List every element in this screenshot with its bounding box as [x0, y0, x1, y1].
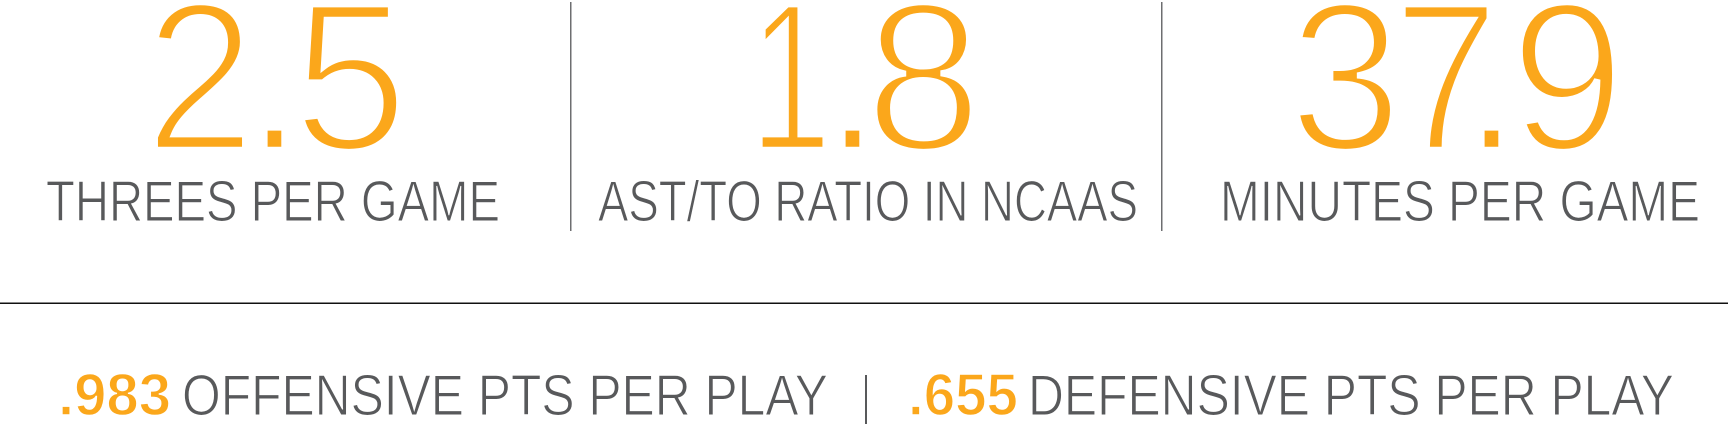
label ast/to ratio: AST/TO RATIO IN NCAAS	[598, 170, 1138, 234]
big number 2.5	[145, 0, 408, 195]
bottom separator	[865, 375, 867, 424]
defensive points per play	[908, 362, 1674, 428]
offensive points per play	[58, 362, 828, 428]
stat: assist to turnover ratio	[598, 0, 1138, 234]
horizontal rule	[0, 302, 1728, 304]
label offensive: OFFENSIVE PTS PER PLAY	[182, 364, 828, 428]
divider left	[570, 2, 572, 231]
stat: threes per game	[46, 0, 500, 234]
big number 37.9	[1289, 0, 1625, 195]
big number 1.8	[749, 0, 982, 195]
divider right	[1161, 2, 1162, 231]
label threes per game: THREES PER GAME	[46, 170, 500, 234]
value .983: .983	[58, 362, 171, 428]
value .655: .655	[908, 362, 1018, 428]
stat: minutes per game	[1220, 0, 1700, 234]
